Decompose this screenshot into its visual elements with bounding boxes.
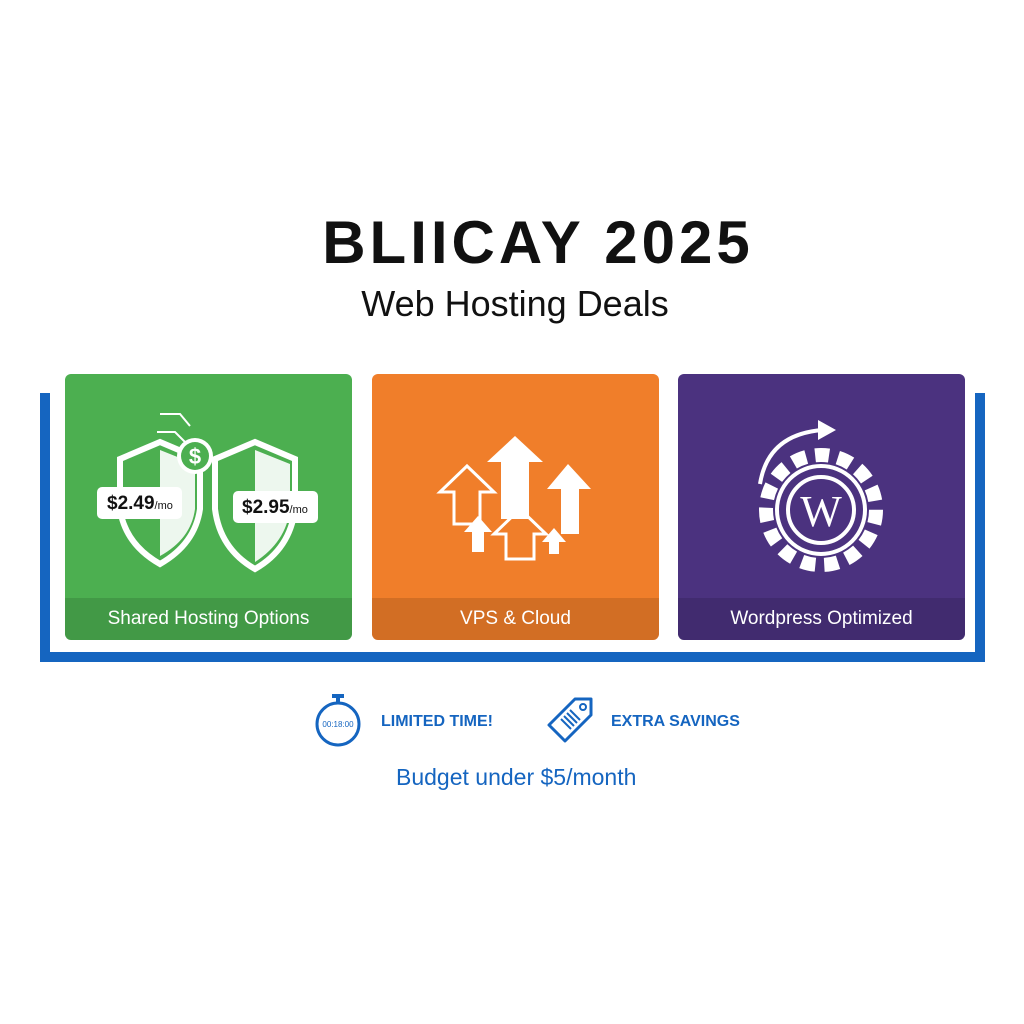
icon: shields with prices: $2.95/mo [242,497,308,518]
label [678,598,965,640]
label [65,598,352,640]
icon: gear with W: W [800,487,842,536]
label: Shared Hosting Options [108,608,309,629]
text: limited time: LIMITED TIME! [381,713,493,730]
label: Wordpress Optimized [730,608,913,629]
icon: shields with prices: $ [189,444,201,469]
icon: price tag [547,698,592,743]
title: BLIICAY 2025 [322,209,754,276]
label: VPS & Cloud [460,608,571,629]
blue frame [40,393,985,662]
icon: stopwatch: 00:18:00 [322,720,354,729]
label [372,598,659,640]
subtitle: Web Hosting Deals [361,283,669,324]
panel: vps & cloud [372,374,659,640]
icon: gear with W [758,420,883,572]
icon: shields with prices [97,413,318,572]
text: extra savings: EXTRA SAVINGS [611,713,740,730]
panel: shared hosting [65,374,352,640]
icon: shields with prices: $2.49/mo [107,493,173,514]
icon: stopwatch [316,694,360,746]
icon: up arrows [436,436,591,560]
text: budget: Budget under $5/month [396,764,636,790]
panel: wordpress [678,374,965,640]
